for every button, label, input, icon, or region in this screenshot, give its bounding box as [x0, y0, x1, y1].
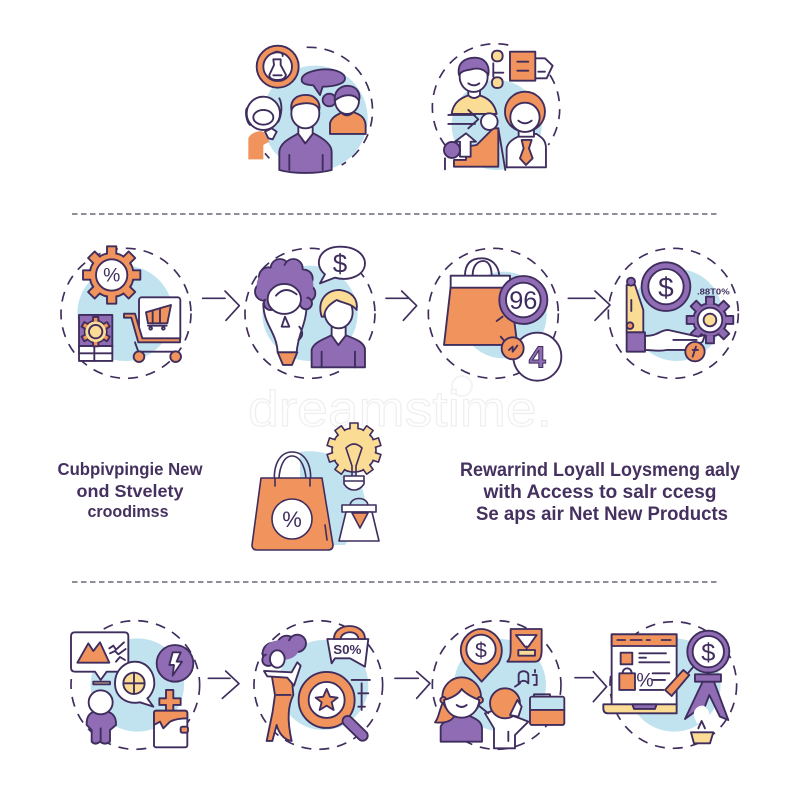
icon: customer idea and payment: $ — [333, 248, 348, 278]
top row icons — [246, 44, 560, 173]
arrow — [386, 296, 408, 301]
icon: hand with coin and gear — [608, 248, 738, 378]
arrow — [395, 676, 418, 681]
icon: data chat and wallet — [71, 621, 200, 749]
icon: laptop page and award: % — [636, 671, 654, 692]
arrow head — [402, 291, 417, 320]
icon: woman and magnifier — [254, 621, 383, 749]
text block: right label — [460, 460, 740, 525]
icon: shopping bag discount: 4 — [529, 341, 546, 375]
icon: location pin and consultation — [432, 621, 564, 749]
icon: shopping bag discount — [428, 248, 561, 381]
arrow — [208, 671, 239, 698]
arrow head — [417, 672, 430, 698]
icon: customer support team — [246, 46, 373, 173]
icon: shopping bag discount: 96 — [509, 287, 537, 315]
arrow — [203, 291, 239, 320]
second row icons — [61, 246, 408, 378]
text block: right label: Rewarrind Loyall Loysmeng aaly — [460, 460, 740, 481]
text block: left label: Cubpivpingie New — [58, 459, 203, 479]
icon: shopping bag with light bulb — [252, 423, 381, 550]
icon: hand with coin and gear: $ — [658, 272, 674, 303]
arrow — [568, 291, 610, 320]
icon: hand with coin and gear: .88T0% — [697, 286, 730, 296]
icon: woman and magnifier: S0% — [333, 642, 362, 657]
text block: left label: ond Stvelety — [76, 481, 184, 501]
icon: location pin and consultation: $ — [475, 638, 487, 662]
text block: left label: croodimss — [88, 502, 168, 521]
icon: laptop page and award — [603, 622, 737, 748]
icon: shopping bag with light bulb: % — [282, 507, 302, 532]
text block: right label: Se aps air Net New Products — [476, 504, 728, 525]
icon: discount gear and shopping cart — [61, 246, 191, 378]
arrow — [575, 672, 607, 702]
divider — [72, 581, 720, 583]
icon: customer idea and payment — [245, 247, 375, 378]
icon: discount gear and shopping cart: % — [103, 266, 120, 287]
watermark: dreamstime. — [248, 381, 552, 437]
icon: laptop page and award: $ — [701, 639, 715, 667]
text block: right label: with Access to salr ccesg — [482, 482, 716, 503]
divider — [72, 213, 720, 215]
text block: left label — [58, 459, 203, 521]
bottom row icons — [71, 621, 418, 749]
middle row — [58, 423, 740, 550]
icon: colleagues and growth chart — [432, 44, 560, 170]
